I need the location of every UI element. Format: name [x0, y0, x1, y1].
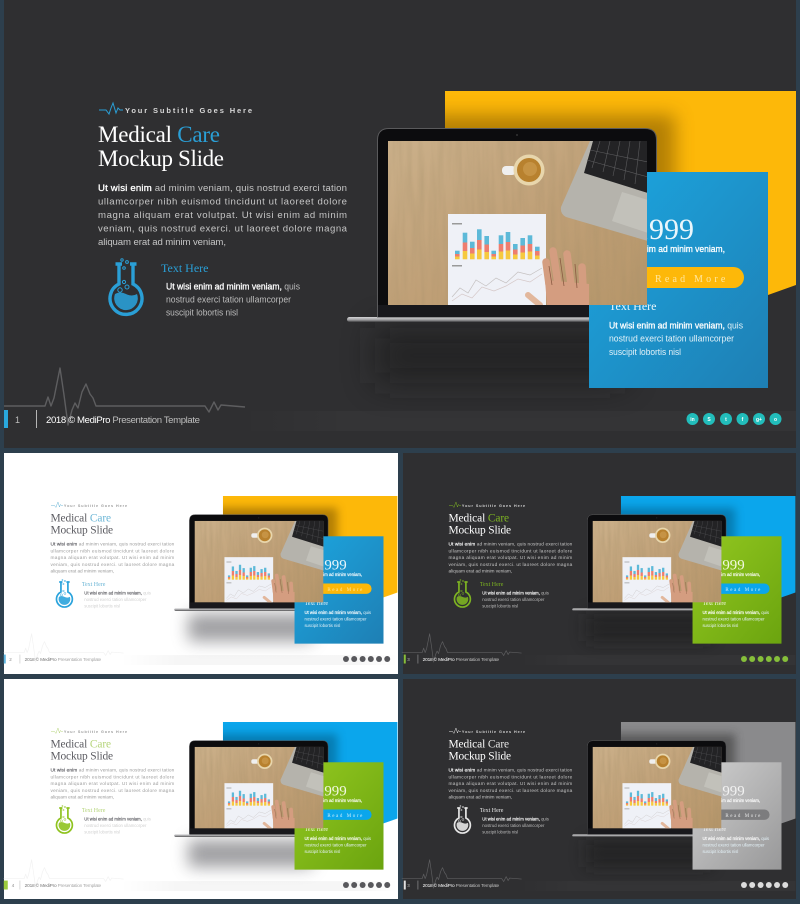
panel: light slide, green accent: 2018 © MediPro Presentation Template: [25, 882, 102, 889]
panel: light slide, blue accent: nostrud exerci tation ullamcorper: [304, 617, 367, 623]
panel: light slide, blue accent: 2018 © MediPro Presentation Template: [25, 656, 102, 663]
social icons: o: [774, 417, 777, 423]
panel: dark slide, gray accent: Ut wisi enim ad minim veniam,: [703, 798, 760, 804]
panel: dark slide, gray accent: 2018 © MediPro Presentation Template: [423, 882, 500, 889]
panel: light slide, blue accent: Medical Care: [51, 512, 111, 524]
text here block: Text Here: [161, 261, 208, 275]
info card: Text Here: [609, 299, 656, 313]
panel: light slide, blue accent: Ut wisi enim ad minim veniam, quis: [84, 591, 151, 597]
body paragraph: ullamcorper nibh euismod tincidunt ut laoreet dolore: [98, 196, 347, 208]
panel: light slide, green accent: magna aliquam erat volutpat. Ut wisi enim ad minim: [51, 781, 174, 787]
panel: light slide, blue accent: $5,999: [306, 558, 347, 574]
panel: light slide, green accent: Text Here: [304, 827, 328, 833]
panel: dark slide, gray accent: nostrud exerci tation ullamcorper: [482, 823, 545, 829]
panel: dark slide, green accent: Ut wisi enim ad minim veniam, quis nostrud exerci tation: [449, 542, 573, 548]
panel: dark slide, gray accent: Text Here: [702, 827, 726, 833]
yellow backdrop shape: [445, 91, 796, 312]
footer: 2018 © MediPro Presentation Template: [46, 415, 200, 426]
panel: light slide, blue accent: Text Here: [304, 601, 328, 607]
icon: flask: [110, 259, 142, 314]
footer band: [240, 411, 796, 431]
panel: dark slide, gray accent: suscipit lobortis nisl: [482, 830, 518, 836]
social icons: in: [690, 417, 695, 423]
social icons: f: [742, 417, 744, 423]
panel: light slide, green accent: aliquam erat ad minim veniam,: [51, 795, 114, 801]
panel: dark slide, green accent: Ut wisi enim ad minim veniam, quis: [702, 610, 770, 616]
social icons: S: [707, 417, 711, 423]
panel: light slide, blue accent: aliquam erat ad minim veniam,: [51, 569, 114, 575]
panel: dark slide, green accent: $5,999: [704, 558, 745, 574]
panel: light slide, green accent: Ut wisi enim ad minim veniam, quis nostrud exerci tation: [51, 768, 175, 774]
body paragraph: aliquam erat ad minim veniam,: [98, 237, 226, 248]
panel: dark slide, green accent: Medical Care: [449, 512, 509, 524]
panel: dark slide, green accent: Mockup Slide: [449, 524, 511, 536]
panel: dark slide, green accent: aliquam erat ad minim veniam,: [449, 569, 512, 575]
panel: light slide, blue accent: suscipit lobortis nisl: [304, 623, 340, 629]
panel: dark slide, gray accent: Ut wisi enim ad minim veniam, quis: [702, 836, 770, 842]
title: Mockup Slide: [98, 146, 224, 171]
panel: dark slide, gray accent: Ut wisi enim ad minim veniam, quis: [482, 817, 549, 823]
panel: light slide, blue accent: ullamcorper nibh euismod tincidunt ut laoreet dolore: [51, 548, 175, 554]
text here block: [161, 261, 300, 318]
panel: dark slide, green accent: Ut wisi enim ad minim veniam,: [703, 572, 760, 578]
panel: dark slide, green accent: suscipit lobortis nisl: [482, 604, 518, 610]
panel: dark slide, gray accent: $5,999: [704, 784, 745, 800]
panel: light slide, green accent: Your Subtitle Goes Here: [64, 730, 127, 734]
panel: light slide, green accent: nostrud exerci tation ullamcorper: [84, 823, 147, 829]
panel: dark slide, gray accent: nostrud exerci tation ullamcorper: [702, 843, 765, 849]
panel: light slide, blue accent: veniam, quis nostrud exerci. ut laoreet dolore magna: [51, 562, 175, 568]
panel: dark slide, gray accent: aliquam erat ad minim veniam,: [449, 795, 512, 801]
panel: light slide, blue accent: nostrud exerci tation ullamcorper: [84, 597, 147, 603]
panel: dark slide, green accent: 2018 © MediPro Presentation Template: [423, 656, 500, 663]
info card: suscipit lobortis nisl: [609, 347, 681, 358]
panel: light slide, green accent: [4, 679, 398, 899]
panel: dark slide, green accent: 3: [407, 657, 410, 662]
panel: light slide, blue accent: magna aliquam erat volutpat. Ut wisi enim ad minim: [51, 555, 174, 561]
panel: light slide, green accent: Ut wisi enim ad minim veniam,: [305, 798, 362, 804]
info card: nostrud exerci tation ullamcorper: [609, 334, 735, 344]
social icons: g+: [756, 417, 762, 423]
body paragraph: magna aliquam erat volutpat. Ut wisi enim ad minim: [98, 210, 347, 221]
panel: light slide, blue accent: Ut wisi enim ad minim veniam, quis: [304, 610, 372, 616]
panel: dark slide, green accent: Ut wisi enim ad minim veniam, quis: [482, 591, 549, 597]
info card: Read More: [655, 274, 729, 285]
panel: light slide, green accent: Mockup Slide: [51, 750, 113, 762]
panel: light slide, green accent: $5,999: [306, 784, 347, 800]
panel: light slide, green accent: ullamcorper nibh euismod tincidunt ut laoreet dolore: [51, 774, 175, 780]
info card: $5,999: [612, 213, 694, 246]
panel: dark slide, gray accent: suscipit lobortis nisl: [702, 849, 738, 855]
panel: light slide, blue accent: Your Subtitle Goes Here: [64, 504, 127, 508]
panel: dark slide, gray accent: Text Here: [480, 808, 504, 814]
ground shadow: [375, 328, 625, 383]
info card: [589, 172, 768, 388]
panel: dark slide, green accent: Your Subtitle Goes Here: [462, 504, 525, 508]
social icons: [686, 413, 782, 425]
panel: light slide, green accent: Medical Care: [51, 738, 111, 750]
body paragraph: [98, 183, 348, 248]
panel: dark slide, gray accent: 3: [407, 883, 410, 888]
panel: light slide, blue accent: [4, 453, 398, 674]
panel: light slide, green accent: suscipit lobortis nisl: [304, 849, 340, 855]
panel: light slide, blue accent: Mockup Slide: [51, 524, 113, 536]
panel: light slide, blue accent: Ut wisi enim ad minim veniam,: [305, 572, 362, 578]
panel: dark slide, gray accent: ullamcorper nibh euismod tincidunt ut laoreet dolore: [449, 774, 573, 780]
panel: light slide, green accent: Text Here: [82, 808, 106, 814]
footer: [4, 410, 200, 428]
panel: dark slide, green accent: Text Here: [702, 601, 726, 607]
panel: light slide, blue accent: Text Here: [82, 582, 106, 588]
panel: light slide, green accent: veniam, quis nostrud exerci. ut laoreet dolore magna: [51, 788, 175, 794]
text here block: suscipit lobortis nisl: [166, 308, 238, 318]
footer: 1: [15, 415, 20, 425]
panel: dark slide, green accent: Read More: [725, 588, 762, 593]
heartbeat line: [4, 368, 245, 425]
subtitle with pulse icon: [99, 103, 252, 115]
panel: light slide, green accent: 4: [12, 883, 15, 888]
subtitle with pulse icon: Your Subtitle Goes Here: [125, 106, 252, 115]
laptop shadow on shape: [445, 104, 686, 172]
title: [98, 122, 224, 171]
laptop screen photo: [388, 141, 648, 305]
body paragraph: Ut wisi enim ad minim veniam, quis nostrud exerci tation: [98, 183, 347, 194]
panel: dark slide, green accent: nostrud exerci tation ullamcorper: [702, 617, 765, 623]
panel: dark slide, gray accent: Your Subtitle Goes Here: [462, 730, 525, 734]
panel: dark slide, gray accent: [402, 679, 796, 899]
panel: dark slide, gray accent: Ut wisi enim ad minim veniam, quis nostrud exerci tation: [449, 768, 573, 774]
panel: light slide, green accent: Ut wisi enim ad minim veniam, quis: [84, 817, 151, 823]
panel: light slide, blue accent: suscipit lobortis nisl: [84, 604, 120, 610]
panel: light slide, blue accent: 2: [9, 657, 12, 662]
panel: main dark slide, blue accent: [4, 0, 796, 448]
social icons: t: [725, 417, 727, 423]
panel: dark slide, green accent: suscipit lobortis nisl: [702, 623, 738, 629]
panel: light slide, green accent: Ut wisi enim ad minim veniam, quis: [304, 836, 372, 842]
text here block: Ut wisi enim ad minim veniam, quis: [166, 282, 300, 292]
laptop: [347, 128, 656, 322]
panel: dark slide, green accent: Text Here: [480, 582, 504, 588]
panel: dark slide, green accent: magna aliquam erat volutpat. Ut wisi enim ad minim: [449, 555, 572, 561]
panel: dark slide, gray accent: Medical Care: [449, 738, 509, 750]
panel: dark slide, gray accent: Read More: [725, 814, 762, 819]
panel: dark slide, gray accent: magna aliquam erat volutpat. Ut wisi enim ad minim: [449, 781, 572, 787]
info card: Ut wisi enim ad minim veniam,: [610, 244, 725, 255]
panel: dark slide, green accent: [402, 453, 796, 674]
panel: dark slide, gray accent: veniam, quis nostrud exerci. ut laoreet dolore magna: [449, 788, 573, 794]
panel: dark slide, gray accent: Mockup Slide: [449, 750, 511, 762]
info card: Ut wisi enim ad minim veniam, quis: [609, 320, 743, 332]
panel: dark slide, green accent: ullamcorper nibh euismod tincidunt ut laoreet dolore: [449, 548, 573, 554]
panel: light slide, green accent: Read More: [327, 814, 364, 819]
panel: dark slide, green accent: veniam, quis nostrud exerci. ut laoreet dolore magna: [449, 562, 573, 568]
text here block: nostrud exerci tation ullamcorper: [166, 294, 292, 306]
panel: light slide, green accent: suscipit lobortis nisl: [84, 830, 120, 836]
panel: dark slide, green accent: nostrud exerci tation ullamcorper: [482, 597, 545, 603]
title: Medical Care: [98, 122, 220, 147]
panel: light slide, green accent: nostrud exerci tation ullamcorper: [304, 843, 367, 849]
panel: light slide, blue accent: Ut wisi enim ad minim veniam, quis nostrud exerci tation: [51, 542, 175, 548]
panel: light slide, blue accent: Read More: [327, 588, 364, 593]
body paragraph: veniam, quis nostrud exerci. ut laoreet dolore magna: [98, 224, 348, 234]
